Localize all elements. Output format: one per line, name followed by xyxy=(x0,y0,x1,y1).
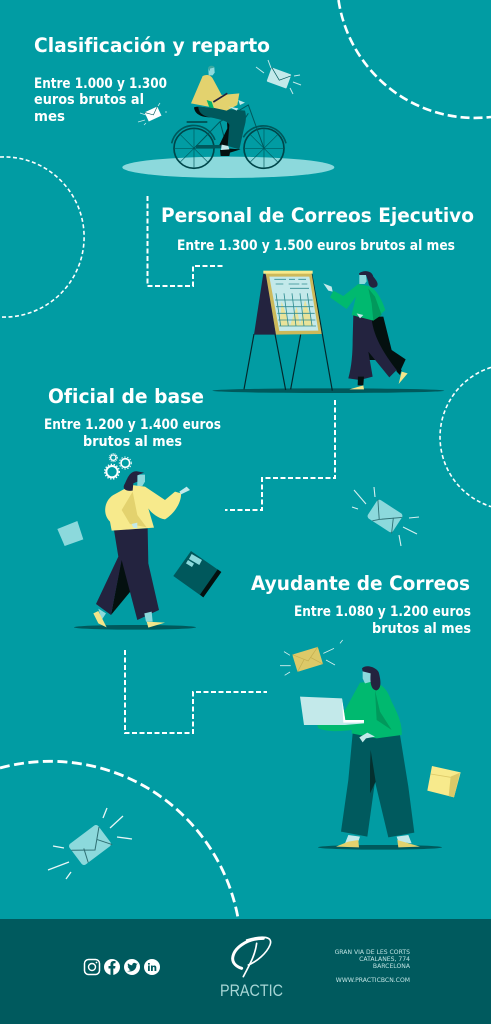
rider head xyxy=(208,67,215,75)
board back xyxy=(254,273,276,335)
address text: BARCELONA xyxy=(373,963,411,970)
illustration: cyclist xyxy=(122,66,334,178)
rider legs xyxy=(194,107,235,147)
hands xyxy=(179,487,190,494)
hand xyxy=(359,733,375,742)
ground ellipse xyxy=(122,157,334,178)
icon: envelope centre right xyxy=(352,487,419,546)
heading: Clasificación y reparto xyxy=(34,34,270,57)
icon: instagram xyxy=(84,960,100,974)
pants xyxy=(96,528,159,620)
rider bag xyxy=(207,100,214,108)
envelope xyxy=(267,67,291,89)
sparks xyxy=(256,60,301,94)
chart lines xyxy=(274,279,316,326)
back leg shade xyxy=(111,557,132,615)
footer xyxy=(0,919,491,1024)
rider bag strap xyxy=(213,93,227,102)
illustration: woman with laptop xyxy=(280,640,461,850)
woman sweater xyxy=(330,284,385,321)
dashed connector 1 xyxy=(148,196,225,286)
illustration: woman with gears xyxy=(57,454,221,630)
ground shadow xyxy=(74,625,196,630)
head and hair xyxy=(137,475,145,486)
sparks xyxy=(48,808,132,879)
salary text: brutos al mes xyxy=(83,434,182,450)
salary text: mes xyxy=(34,109,65,125)
section: Oficial de base text xyxy=(44,385,221,450)
woman back leg xyxy=(363,317,406,372)
woman head xyxy=(359,274,367,284)
icon: twitter xyxy=(124,959,140,975)
woman hand xyxy=(323,283,333,292)
shoes xyxy=(93,611,165,628)
envelope yellow xyxy=(292,647,323,672)
sweater xyxy=(105,485,181,531)
salary text: Entre 1.200 y 1.400 euros xyxy=(44,417,221,433)
rider shoe xyxy=(220,149,241,156)
bicycle xyxy=(172,105,286,168)
icon: envelope bottom left xyxy=(48,808,132,879)
dashed circle: top right xyxy=(338,0,491,118)
laptop xyxy=(300,697,364,725)
logo xyxy=(220,937,283,1000)
box dark xyxy=(173,551,221,597)
sweater xyxy=(317,682,402,738)
board top bar xyxy=(263,271,313,274)
heading: Personal de Correos Ejecutivo xyxy=(161,204,474,227)
dashed circle: bottom left xyxy=(0,761,238,918)
dashed circle: left xyxy=(0,157,84,317)
chart peaks xyxy=(279,300,313,327)
heading: Ayudante de Correos xyxy=(251,572,470,595)
woman feet xyxy=(358,366,402,385)
icon: envelope top right xyxy=(256,60,301,94)
sparks xyxy=(138,103,167,125)
illustration: woman with chart board xyxy=(212,271,444,393)
section: Ayudante de Correos text xyxy=(251,572,471,637)
icon: envelope small xyxy=(138,103,167,125)
woman pants xyxy=(348,315,397,380)
address text: WWW.PRACTICBCN.COM xyxy=(336,977,410,984)
icon: facebook xyxy=(104,959,120,975)
head and hair xyxy=(363,671,372,683)
sparks xyxy=(280,640,343,675)
dashed circle: right xyxy=(440,367,491,507)
salary text: Entre 1.000 y 1.300 xyxy=(34,76,167,92)
pants xyxy=(341,733,414,837)
ankles xyxy=(345,835,412,843)
section: Personal de Correos Ejecutivo text xyxy=(161,204,474,254)
logo wordmark: PRACTIC xyxy=(220,981,283,1000)
box teal xyxy=(57,521,83,546)
envelope xyxy=(366,499,404,533)
shoes xyxy=(336,840,420,847)
board frame xyxy=(266,273,322,335)
envelope xyxy=(145,107,161,121)
dashed connector 3 xyxy=(125,650,267,733)
envelope xyxy=(68,824,112,866)
rider shirt xyxy=(191,75,239,111)
easel legs xyxy=(244,273,332,391)
address text: GRAN VIA DE LES CORTS xyxy=(335,949,410,956)
gears xyxy=(105,454,131,479)
rider hand xyxy=(228,100,245,111)
ground shadow xyxy=(212,388,444,393)
address text: CATALANES, 774 xyxy=(359,956,410,963)
ankles xyxy=(98,609,153,622)
sparks xyxy=(352,487,419,546)
board sheet xyxy=(269,277,318,331)
ground shadow xyxy=(318,845,442,850)
salary text: euros brutos al xyxy=(34,92,144,108)
heading: Oficial de base xyxy=(48,385,204,408)
logo mark xyxy=(233,937,271,977)
footer bar xyxy=(0,919,491,1024)
icon: linkedin xyxy=(144,959,160,975)
salary text: brutos al mes xyxy=(372,621,471,637)
box yellow xyxy=(427,766,461,797)
dashed connector 2 xyxy=(225,400,335,510)
section: Clasificación y reparto text xyxy=(34,34,270,125)
